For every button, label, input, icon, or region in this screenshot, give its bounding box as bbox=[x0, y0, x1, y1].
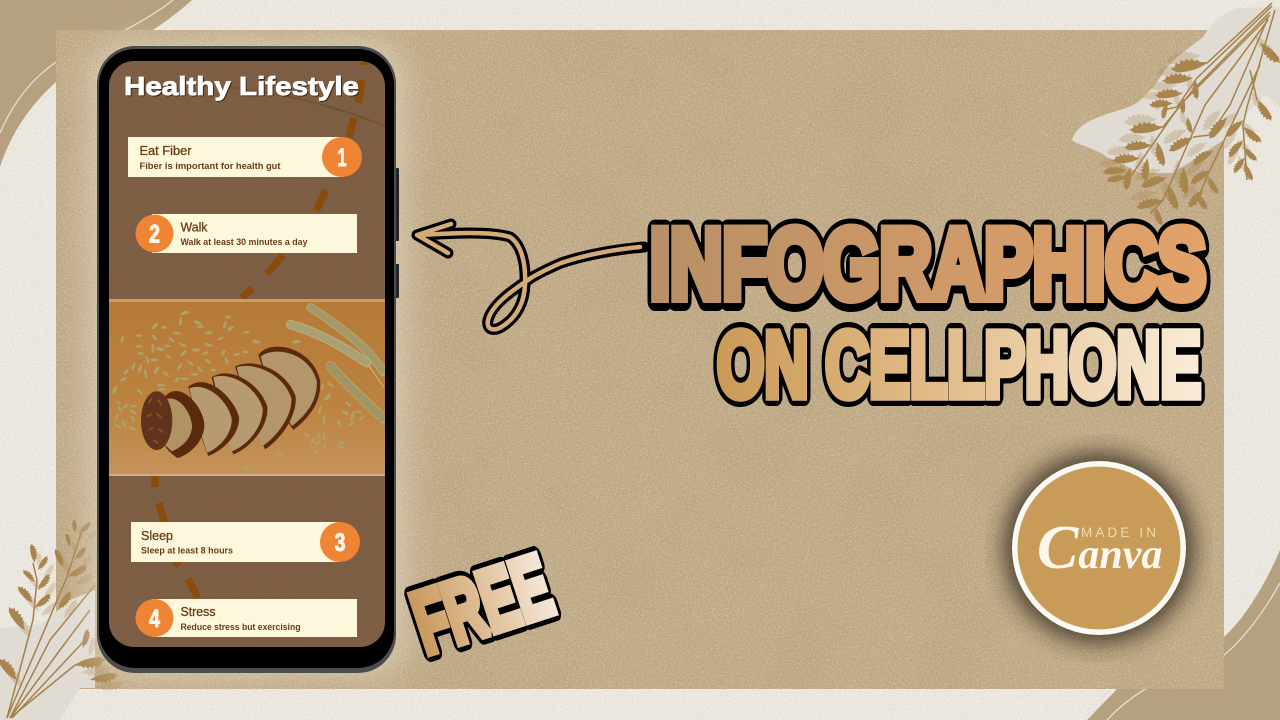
step 1: eat fiber: Fiber is important for health gut bbox=[140, 161, 280, 171]
step 2: walk: Walk at least 30 minutes a day bbox=[180, 237, 308, 247]
photo: bread on wooden board bbox=[109, 299, 385, 476]
step 4: stress bbox=[136, 599, 357, 637]
phone mockup bbox=[97, 46, 399, 673]
screen title: Healthy Lifestyle bbox=[125, 72, 360, 102]
glow around phone bbox=[86, 38, 408, 678]
step 4: stress: Stress bbox=[180, 605, 216, 619]
step 4: stress: Reduce stress but exercising bbox=[180, 622, 300, 632]
step 2: walk bbox=[136, 214, 357, 253]
step 1: eat fiber: Eat Fiber bbox=[140, 144, 192, 158]
step 4: stress: 4 bbox=[149, 605, 160, 633]
phone body bbox=[97, 46, 396, 673]
step 3: sleep: Sleep bbox=[141, 529, 173, 543]
decoration: bottom-left blob bbox=[0, 590, 95, 720]
wheat ears bbox=[291, 307, 383, 418]
phone screen bbox=[109, 61, 385, 647]
grains bbox=[111, 310, 365, 470]
bread slices bbox=[141, 347, 320, 458]
free badge bbox=[402, 537, 563, 672]
step 1: eat fiber: 1 bbox=[338, 144, 347, 172]
free badge: FREE bbox=[402, 537, 563, 672]
step 2: walk: Walk bbox=[180, 220, 208, 234]
decoration: top-left corner arc bbox=[0, 0, 192, 167]
step 2: walk: 2 bbox=[149, 220, 160, 248]
made in canva badge: Canva bbox=[1037, 514, 1162, 582]
made in canva badge bbox=[1004, 453, 1194, 643]
decoration: top-right blob bbox=[1072, 7, 1280, 173]
step 1: eat fiber bbox=[128, 137, 362, 177]
decoration: bottom-right corner arc bbox=[1087, 550, 1280, 720]
step 3: sleep: Sleep at least 8 hours bbox=[141, 546, 233, 556]
step 3: sleep bbox=[131, 522, 360, 562]
decoration: bottom-left wheat branch bbox=[0, 519, 124, 718]
arrow pointing to phone bbox=[417, 224, 644, 329]
screen title: Healthy Lifestyle bbox=[124, 71, 359, 101]
decoration: top-right wheat branch bbox=[1097, 3, 1280, 227]
free badge: FREE bbox=[402, 537, 563, 672]
phone side buttons bbox=[394, 168, 399, 298]
made in canva badge: MADE IN bbox=[1081, 525, 1156, 540]
dashed route path bbox=[155, 62, 363, 598]
step 3: sleep: 3 bbox=[334, 529, 346, 557]
